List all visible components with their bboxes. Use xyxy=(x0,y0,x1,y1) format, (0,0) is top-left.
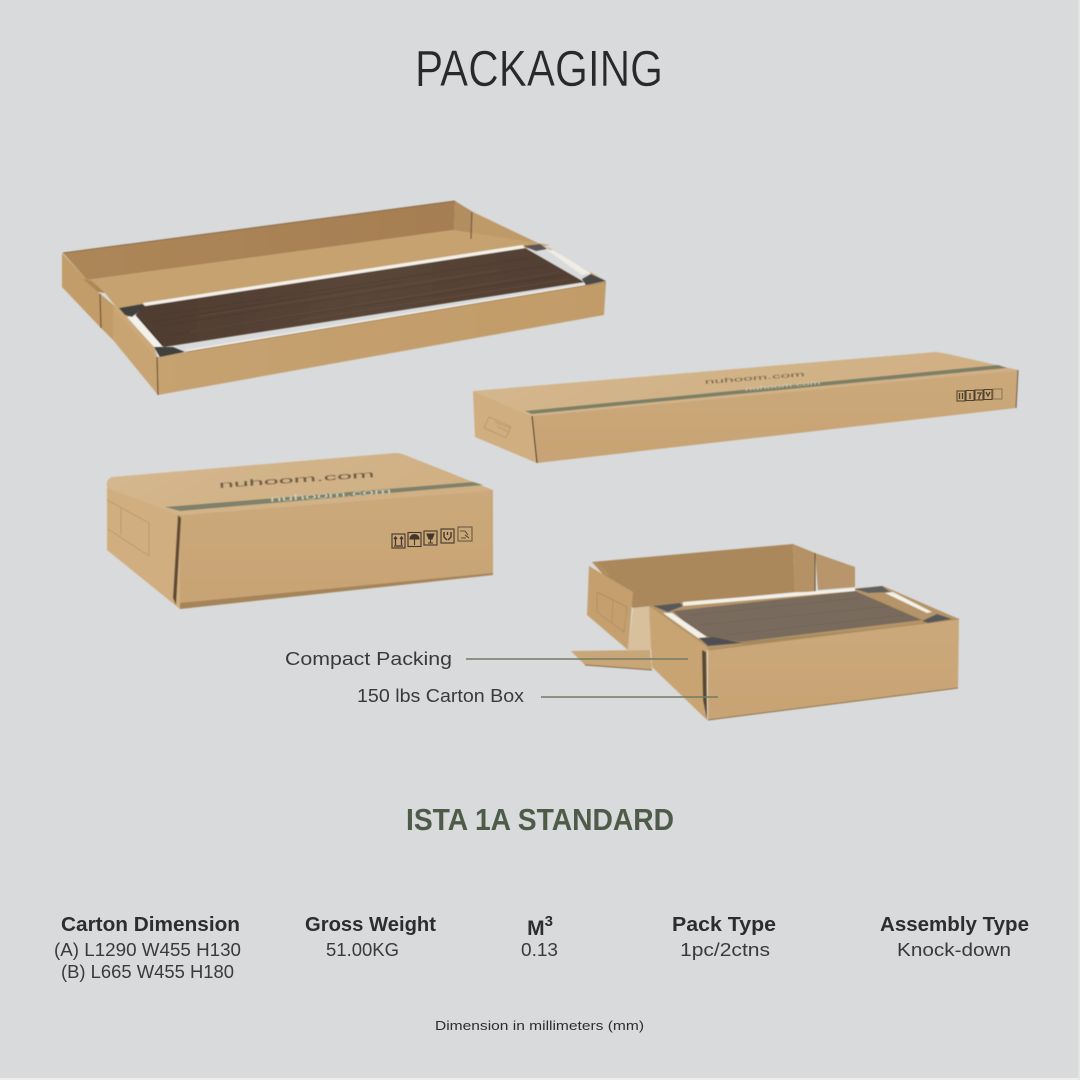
callout: compact packing: Compact Packing xyxy=(285,649,452,669)
spec: carton dimension xyxy=(54,914,241,982)
spec: cubic metres: M xyxy=(527,917,545,940)
spec: pack type: 1pc/2ctns xyxy=(680,940,770,960)
spec: gross weight xyxy=(305,914,436,960)
spec: pack type: Pack Type xyxy=(672,914,776,936)
spec: pack type xyxy=(672,914,776,960)
medium carton handling icons xyxy=(392,527,472,548)
open tray carton with wood panel xyxy=(62,201,606,395)
spec: assembly type xyxy=(880,914,1029,960)
title: PACKAGING xyxy=(415,40,663,97)
spec: cubic metres: 0.13 xyxy=(521,940,558,960)
spec: gross weight: 51.00KG xyxy=(326,940,399,960)
footnote: Dimension in millimeters (mm) xyxy=(435,1018,644,1033)
spec: assembly type: Knock-down xyxy=(897,940,1011,960)
long closed carton xyxy=(473,352,1018,463)
spec: carton dimension: (A) L1290 W455 H130 xyxy=(54,940,241,960)
spec: carton dimension: Carton Dimension xyxy=(61,914,240,936)
long carton stripe logo: nuhoom.com xyxy=(745,380,821,393)
callout: carton box: 150 lbs Carton Box xyxy=(357,686,524,706)
spec: assembly type: Assembly Type xyxy=(880,914,1029,936)
open carton with wood panel xyxy=(571,544,959,720)
medium closed carton xyxy=(107,453,493,609)
spec: cubic metres: 3 xyxy=(545,913,553,930)
medium carton stripe logo: nuhoom.com xyxy=(270,486,393,504)
long carton logo: nuhoom.com xyxy=(705,372,805,386)
wood panel xyxy=(136,248,584,347)
long carton handling icons xyxy=(957,389,1002,401)
spec: cubic metres xyxy=(521,913,558,960)
spec: gross weight: Gross Weight xyxy=(305,914,436,936)
heading: ISTA standard: ISTA 1A STANDARD xyxy=(406,802,674,837)
spec: carton dimension: (B) L665 W455 H180 xyxy=(61,962,234,982)
medium carton logo: nuhoom.com xyxy=(218,469,375,490)
